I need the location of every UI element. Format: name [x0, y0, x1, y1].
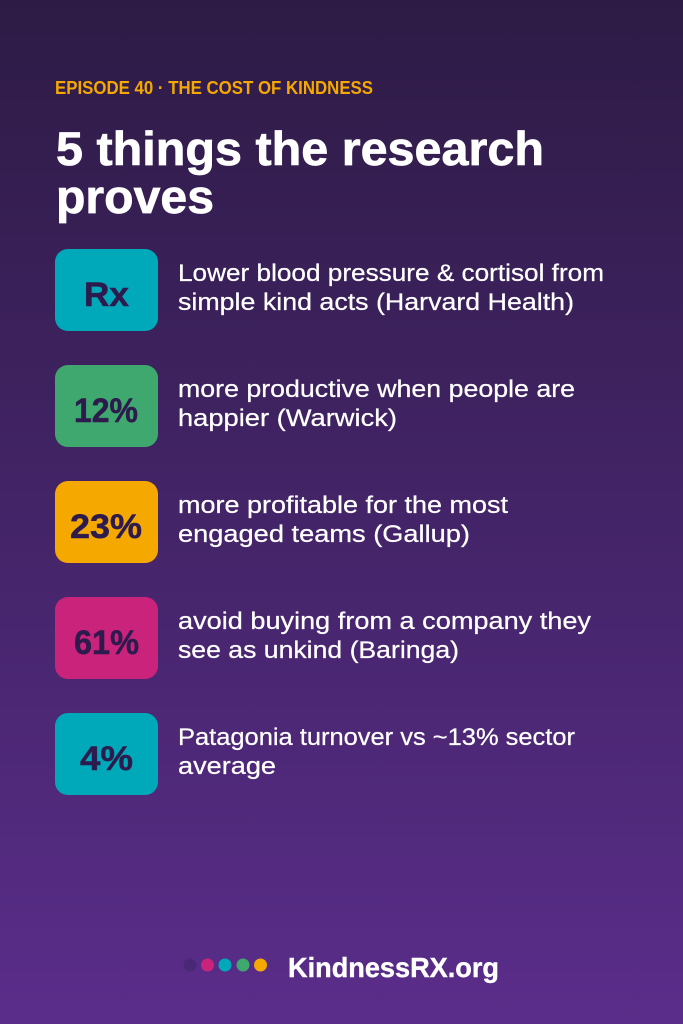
badge: 23%: 23% — [70, 508, 142, 546]
badge: 4%: 4% — [80, 740, 133, 778]
text: blood pressure finding: simple kind acts (Harvard Health) — [178, 289, 574, 316]
text: turnover finding: average — [178, 753, 276, 780]
item 5: turnover — [55, 713, 575, 795]
text: profitability finding — [178, 492, 508, 548]
eyebrow: episode label: EPISODE 40 · THE COST OF KINDNESS — [55, 78, 373, 98]
text: profitability finding: more profitable for the most — [178, 492, 508, 519]
item 1: blood pressure — [55, 249, 604, 331]
text: turnover finding — [178, 724, 575, 780]
badge: 23% — [55, 481, 158, 563]
text: unkind companies finding: see as unkind (Baringa) — [178, 637, 459, 664]
title: proves — [56, 170, 214, 223]
title — [56, 122, 544, 223]
footer: logo — [184, 952, 499, 983]
badge: 12%: 12% — [74, 392, 138, 430]
badge: Rx — [55, 249, 158, 331]
icon: colored dots — [184, 958, 267, 972]
text: productivity finding — [178, 376, 575, 432]
text: unkind companies finding — [178, 608, 592, 664]
title: 5 things the research — [56, 122, 544, 175]
text: profitability finding: engaged teams (Gallup) — [178, 521, 470, 548]
badge: 61% — [55, 597, 158, 679]
website name: KindnessRX.org — [288, 952, 499, 983]
text: unkind companies finding: avoid buying from a company they — [178, 608, 592, 635]
badge: 12% — [55, 365, 158, 447]
item 3: profitability — [55, 481, 508, 563]
item 2: productivity — [55, 365, 575, 447]
text: turnover finding: Patagonia turnover vs ~13% sector — [178, 724, 575, 751]
badge: Rx: Rx — [84, 276, 129, 314]
badge: 61%: 61% — [74, 624, 139, 662]
text: blood pressure finding: Lower blood pressure & cortisol from — [178, 260, 604, 287]
item 4: unkind companies — [55, 597, 592, 679]
badge: 4% — [55, 713, 158, 795]
text: blood pressure finding — [178, 260, 604, 316]
text: productivity finding: happier (Warwick) — [178, 405, 397, 432]
text: productivity finding: more productive when people are — [178, 376, 575, 403]
